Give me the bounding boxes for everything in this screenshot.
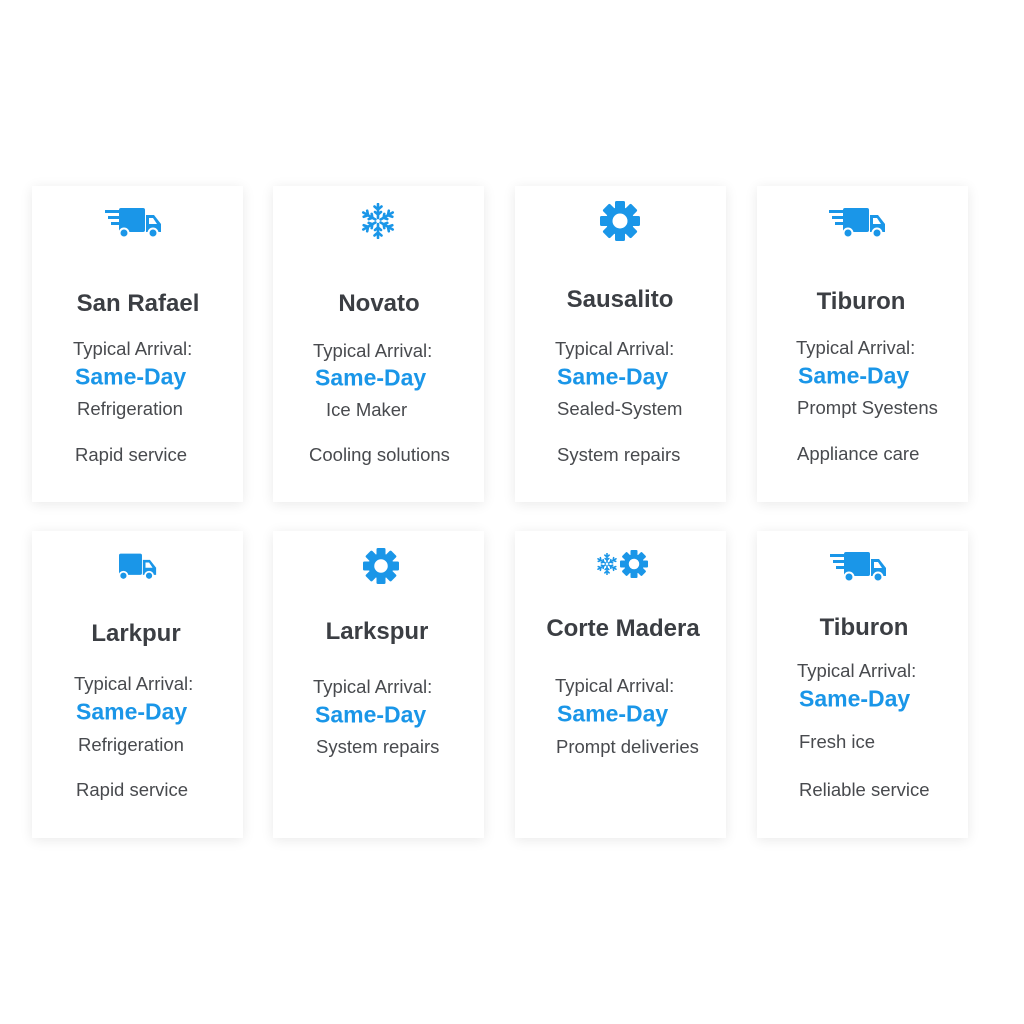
card: Corte Madera (515, 531, 726, 838)
text: Appliance care (797, 443, 919, 464)
text: Prompt deliveries (556, 736, 699, 757)
text: Fresh ice (799, 731, 875, 752)
text: Same-Day (315, 364, 426, 390)
text: Typical Arrival: (555, 675, 674, 696)
text: Larkspur (313, 618, 439, 757)
card: Larkpur (32, 531, 243, 838)
icon: truck 2 (829, 208, 885, 236)
text: Typical Arrival: (313, 676, 432, 697)
text: System repairs (316, 736, 439, 757)
card: Larkspur (273, 531, 484, 838)
text: System repairs (557, 444, 680, 465)
icon: gear 2 (363, 548, 399, 584)
text: Tiburon top (796, 288, 938, 464)
text: Same-Day (798, 362, 909, 388)
card: Novato (273, 186, 484, 502)
card: Tiburon top (757, 186, 968, 502)
icon: snowflake and gear (597, 550, 648, 578)
text: Sausalito (555, 286, 682, 465)
icon: truck 1 (105, 208, 161, 236)
text: Typical Arrival: (73, 338, 192, 359)
text: Same-Day (315, 702, 426, 728)
text: Novato (338, 290, 420, 317)
text: San Rafael (73, 290, 199, 465)
icon: snowflake (362, 203, 394, 239)
text: Novato (309, 290, 450, 465)
card: Sausalito (515, 186, 726, 502)
text: Same-Day (557, 364, 668, 390)
icon: box truck (119, 554, 156, 579)
text: Sausalito (567, 286, 673, 313)
text: Typical Arrival: (796, 337, 915, 358)
text: Rapid service (75, 444, 187, 465)
text: Same-Day (557, 700, 668, 726)
text: Sealed-System (557, 398, 682, 419)
text: Typical Arrival: (313, 340, 432, 361)
text: Refrigeration (78, 734, 184, 755)
text: Reliable service (799, 779, 930, 800)
text: Corte Madera (546, 615, 700, 757)
text: Same-Day (76, 698, 187, 724)
text: Tiburon (817, 288, 905, 315)
text: Same-Day (799, 686, 910, 712)
text: Tiburon bottom (797, 614, 930, 800)
text: Cooling solutions (309, 444, 450, 465)
text: Larkpur (74, 620, 193, 800)
text: Ice Maker (326, 399, 407, 420)
text: Corte Madera (546, 615, 700, 642)
text: Larkspur (326, 618, 428, 645)
text: Typical Arrival: (797, 660, 916, 681)
text: Prompt Syestens (797, 397, 938, 418)
text: Typical Arrival: (555, 338, 674, 359)
card: Tiburon bottom (757, 531, 968, 838)
card: San Rafael (32, 186, 243, 502)
text: Typical Arrival: (74, 673, 193, 694)
text: Tiburon (820, 614, 908, 641)
icon: truck 3 (830, 552, 886, 580)
icon: gear 1 (600, 201, 640, 241)
text: Refrigeration (77, 398, 183, 419)
text: Same-Day (75, 364, 186, 390)
text: San Rafael (77, 290, 199, 317)
text: Larkpur (91, 620, 181, 647)
text: Rapid service (76, 779, 188, 800)
